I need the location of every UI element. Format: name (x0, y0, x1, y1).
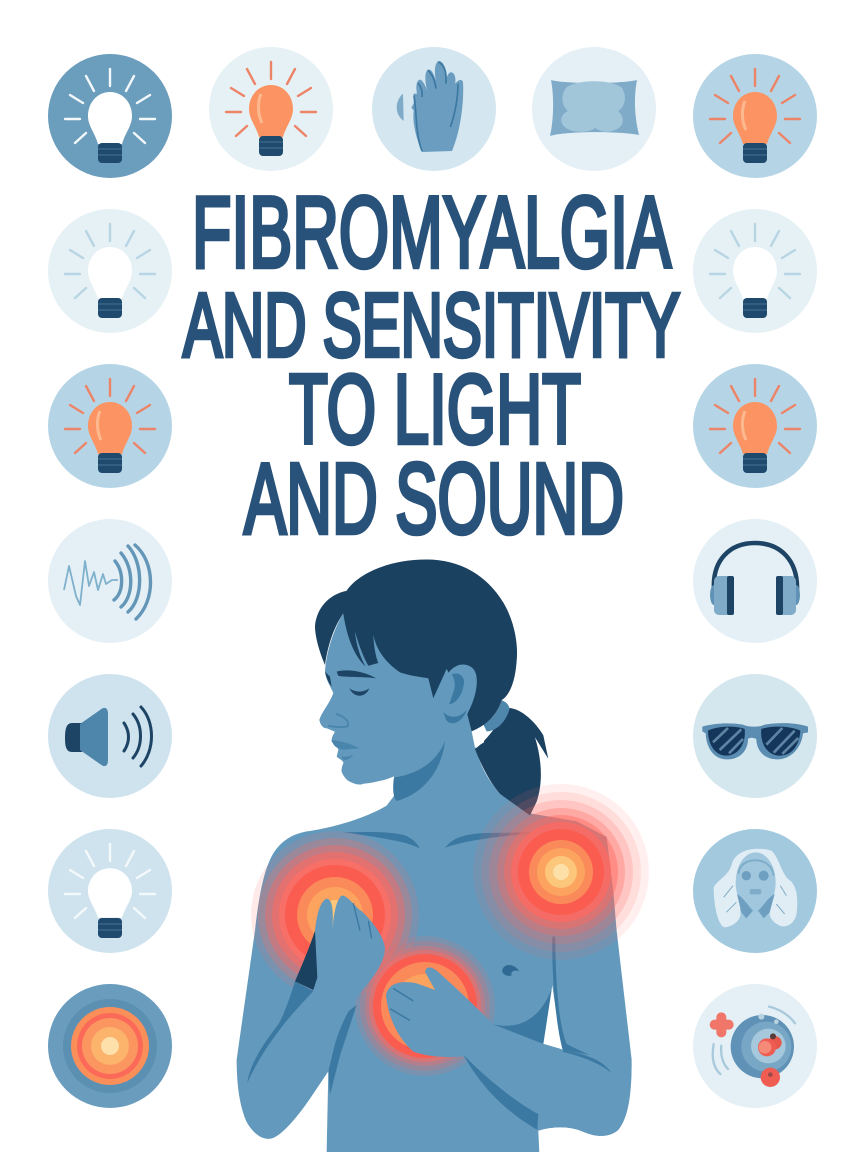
pain rings: lower chest (355, 936, 495, 1076)
body and head (237, 560, 632, 1152)
hair (315, 560, 517, 731)
icon row: top (48, 47, 817, 178)
icon: pale light bulb (693, 209, 817, 333)
figure: woman holding painful chest and shoulder (237, 560, 649, 1152)
icon: tomato and target (693, 984, 817, 1108)
icon column: right (693, 209, 817, 1108)
face features (325, 670, 376, 696)
icon: face with veil (693, 829, 817, 953)
icon: orange light bulb (693, 364, 817, 488)
breast shadow (493, 989, 552, 1044)
arm gap (543, 985, 563, 1050)
icon: pillow (532, 47, 656, 171)
collarbones (343, 832, 540, 849)
gap near ponytail (472, 731, 485, 748)
ponytail (475, 708, 548, 815)
right hand and forearm (386, 967, 632, 1136)
icon: sunglasses (693, 674, 817, 798)
pain rings: left chest (251, 831, 419, 999)
title line 4: AND SOUND (244, 443, 624, 555)
icon: speaker (48, 674, 172, 798)
nipple mark (502, 965, 519, 976)
torso shadow (328, 1005, 357, 1095)
ear (443, 665, 477, 724)
left hand and forearm (248, 895, 385, 1139)
icon column: left (48, 209, 172, 1108)
icon: orange light bulb on pale circle (209, 47, 333, 171)
hand shadows (295, 931, 317, 990)
neck shadow (393, 741, 445, 801)
title line 3: TO LIGHT (289, 354, 581, 464)
icon: white light bulb (48, 829, 172, 953)
hair tie (483, 700, 509, 731)
icon: pale light bulb (48, 209, 172, 333)
icon: hand blocking sound (372, 47, 496, 171)
title (183, 177, 680, 555)
arm crease (552, 936, 612, 1073)
pain rings: shoulder (473, 784, 649, 960)
icon: headphones (693, 519, 817, 643)
icon: orange light bulb on blue circle (693, 54, 817, 178)
icon: orange light bulb (48, 364, 172, 488)
hands and arms (247, 895, 632, 1139)
icon: pain rings (48, 984, 172, 1108)
icon: white light bulb on blue (48, 54, 172, 178)
icon: sound wave (48, 519, 172, 643)
